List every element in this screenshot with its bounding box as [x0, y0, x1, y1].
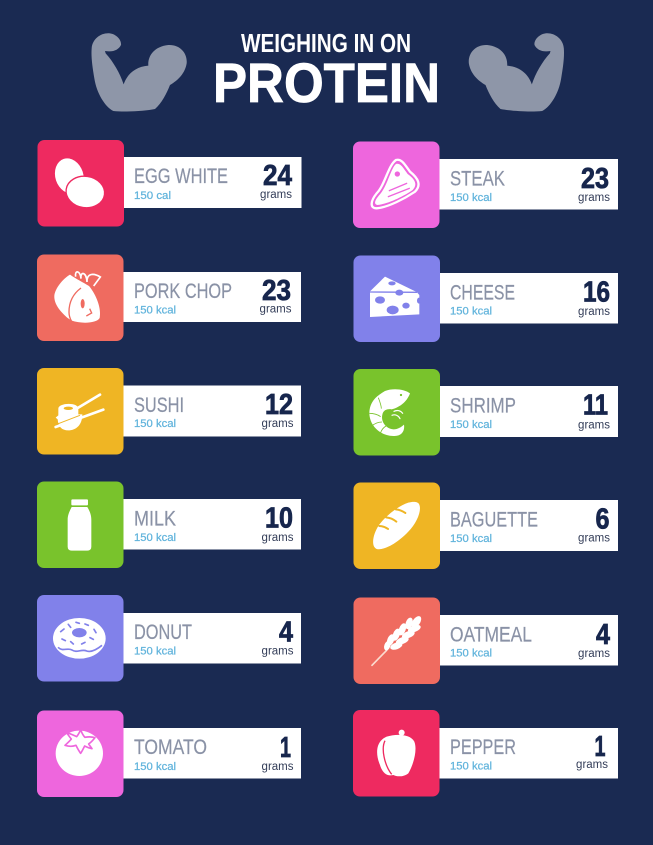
card: tomato: TOMATO [134, 735, 207, 759]
card: steak: 23 [581, 163, 609, 195]
icon: bell pepper [377, 730, 415, 776]
card: cheese: CHEESE [450, 280, 515, 304]
card: sushi: SUSHI [134, 393, 184, 417]
card: tomato: grams [262, 761, 294, 773]
card: baguette: 150 kcal [450, 533, 492, 545]
card: oatmeal [354, 598, 618, 684]
icon: sushi and chopsticks [56, 395, 103, 430]
card: egg white: 24 [263, 160, 292, 192]
card: milk: grams [262, 532, 294, 544]
card: sushi: 12 [265, 389, 293, 421]
card: milk: MILK [134, 506, 177, 530]
card: milk: 10 [265, 502, 293, 534]
icon: milk bottle [68, 499, 91, 551]
card: cheese [354, 256, 618, 342]
icon: wheat stalk [372, 614, 423, 665]
icon: donut [53, 618, 106, 659]
card: egg white: grams [260, 189, 292, 201]
card: egg white [38, 140, 302, 226]
card: steak: STEAK [450, 166, 506, 190]
title line 2: PROTEIN [213, 51, 440, 114]
icon: baguette [373, 502, 420, 549]
icon: steak [372, 160, 419, 208]
card: donut: grams [262, 646, 294, 658]
card: donut: 150 kcal [134, 646, 176, 658]
card: oatmeal: grams [578, 648, 610, 660]
card: pork chop: PORK CHOP [134, 279, 232, 303]
card: shrimp: 150 kcal [450, 419, 492, 431]
card: baguette [354, 482, 618, 569]
card: cheese: 150 kcal [450, 306, 492, 318]
header [91, 28, 564, 114]
icon: eggs [50, 155, 107, 210]
card: shrimp: grams [578, 420, 610, 432]
card: donut: DONUT [134, 620, 192, 644]
card: pork chop: 23 [262, 275, 291, 307]
card: donut: 4 [279, 616, 293, 648]
card: baguette: 6 [596, 504, 610, 536]
card: milk [37, 482, 301, 568]
card: steak: grams [578, 192, 610, 204]
card: donut [37, 595, 301, 682]
card: shrimp: 11 [583, 390, 608, 422]
card: pepper [353, 710, 618, 796]
card: baguette: BAGUETTE [450, 508, 538, 532]
card: milk: 150 kcal [134, 532, 176, 544]
card: cheese: 16 [583, 276, 610, 308]
card: baguette: grams [578, 532, 610, 544]
card: oatmeal: OATMEAL [450, 622, 532, 646]
card: tomato: 1 [280, 732, 291, 764]
card: sushi: 150 kcal [134, 418, 176, 430]
card: cheese: grams [578, 306, 610, 318]
card: sushi: grams [262, 418, 294, 430]
card: shrimp [354, 369, 618, 456]
card: tomato: 150 kcal [134, 761, 176, 773]
card: pepper: 150 kcal [450, 760, 492, 772]
icon: shrimp [369, 389, 410, 436]
icon: right flexed arm [469, 33, 564, 112]
card: sushi [37, 368, 301, 454]
card: steak [353, 142, 618, 228]
card: oatmeal: 4 [596, 619, 610, 651]
icon: cheese wedge [370, 277, 421, 317]
icon: tomato [56, 730, 103, 776]
card: pepper: PEPPER [450, 735, 516, 759]
card: pork chop: 150 kcal [134, 304, 176, 316]
card: pepper: 1 [594, 731, 606, 763]
card: pepper: grams [576, 759, 608, 771]
card: egg white: 150 cal [134, 190, 171, 202]
card: pork chop [37, 254, 301, 341]
card: tomato [37, 710, 301, 797]
card: oatmeal: 150 kcal [450, 648, 492, 660]
title line 1: WEIGHING IN ON [241, 28, 411, 58]
card: steak: 150 kcal [450, 192, 492, 204]
icon: left flexed arm [91, 33, 187, 112]
card: pork chop: grams [260, 304, 292, 316]
card: egg white: EGG WHITE [134, 164, 228, 188]
card: shrimp: SHRIMP [450, 394, 516, 418]
icon: pork chop [54, 272, 100, 323]
